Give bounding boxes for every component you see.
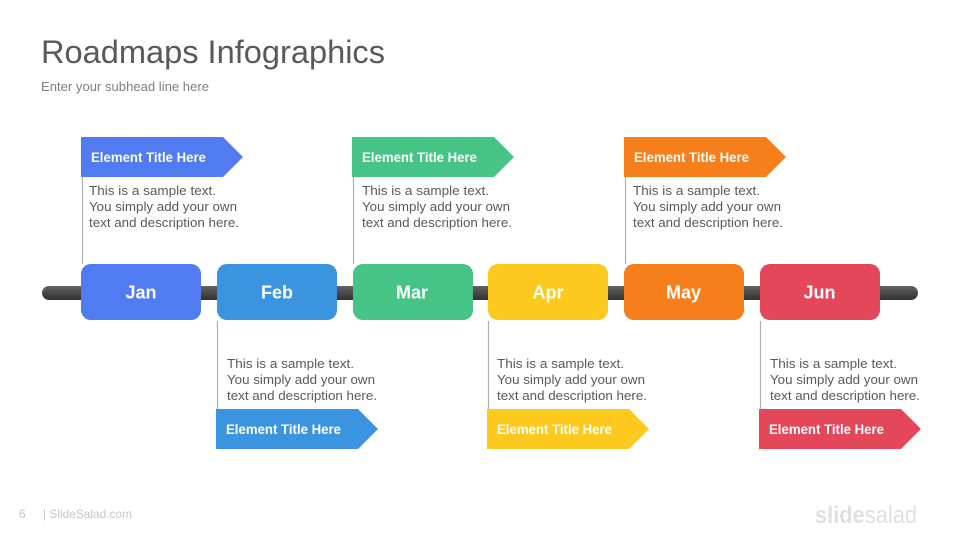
connector line: Feb: [216, 321, 218, 409]
description: Mar: You simply add your own: [362, 200, 510, 214]
page number: 6: [19, 507, 26, 521]
milestone: Feb: [216, 264, 378, 449]
milestone: Jun: [759, 264, 921, 449]
title: Roadmaps Infographics: [41, 34, 385, 70]
arrow label: Jun: [759, 409, 921, 449]
milestone: Jan: [81, 137, 243, 320]
month box: Feb: Feb: [261, 282, 293, 302]
footer source: | SlideSalad.com: [43, 507, 132, 521]
description: Jan: [89, 184, 239, 230]
description: Feb: You simply add your own: [227, 373, 375, 387]
connector line: Jan: [82, 177, 84, 264]
month box: Jun: Jun: [803, 282, 836, 302]
arrow label: Apr: Element Title Here: [497, 421, 612, 437]
description: Jan: You simply add your own: [89, 200, 237, 214]
month box: May: [624, 264, 744, 320]
month box: Apr: [488, 264, 608, 320]
arrow label: May: [624, 137, 786, 177]
description: Jun: text and description here.: [770, 389, 920, 403]
arrow label: Mar: Element Title Here: [362, 149, 477, 165]
description: Apr: This is a sample text.: [497, 357, 624, 371]
logo wordmark: slidesalad: [815, 502, 917, 529]
connector line: Jun: [760, 321, 762, 409]
description: Apr: text and description here.: [497, 389, 647, 403]
month box: Jan: [81, 264, 201, 320]
month box: May: May: [666, 282, 701, 302]
arrow label: Jan: [81, 137, 243, 177]
arrow label: Jan: Element Title Here: [91, 149, 206, 165]
description: Feb: text and description here.: [227, 389, 377, 403]
description: May: [633, 184, 783, 230]
arrow label: Feb: [216, 409, 378, 449]
month box: Feb: [217, 264, 337, 320]
month box: Mar: [353, 264, 473, 320]
description: Mar: text and description here.: [362, 216, 512, 230]
description: Apr: You simply add your own: [497, 373, 645, 387]
milestone: Mar: [352, 137, 514, 320]
month box: Apr: Apr: [532, 282, 564, 302]
description: May: text and description here.: [633, 216, 783, 230]
description: Mar: [362, 184, 512, 230]
description: Feb: This is a sample text.: [227, 357, 354, 371]
arrow label: Mar: [352, 137, 514, 177]
description: May: You simply add your own: [633, 200, 781, 214]
month box: Mar: Mar: [396, 282, 428, 302]
timeline bar: [42, 286, 918, 300]
arrow label: May: Element Title Here: [634, 149, 749, 165]
description: Jan: text and description here.: [89, 216, 239, 230]
arrow label: Apr: [487, 409, 649, 449]
connector line: Mar: [352, 177, 354, 264]
arrow label: Jun: Element Title Here: [769, 421, 884, 437]
milestone: Apr: [487, 264, 649, 449]
description: Mar: This is a sample text.: [362, 184, 489, 198]
description: Jun: You simply add your own: [770, 373, 918, 387]
description: Jan: This is a sample text.: [89, 184, 216, 198]
connector line: May: [624, 177, 626, 264]
month box: Jun: [760, 264, 880, 320]
description: May: This is a sample text.: [633, 184, 760, 198]
description: Jun: [770, 357, 920, 403]
arrow label: Feb: Element Title Here: [226, 421, 341, 437]
description: Jun: This is a sample text.: [770, 357, 897, 371]
description: Apr: [497, 357, 647, 403]
month box: Jan: Jan: [125, 282, 157, 302]
description: Feb: [227, 357, 377, 403]
connector line: Apr: [488, 321, 490, 409]
milestone: May: [624, 137, 786, 320]
subhead: Enter your subhead line here: [41, 80, 209, 94]
